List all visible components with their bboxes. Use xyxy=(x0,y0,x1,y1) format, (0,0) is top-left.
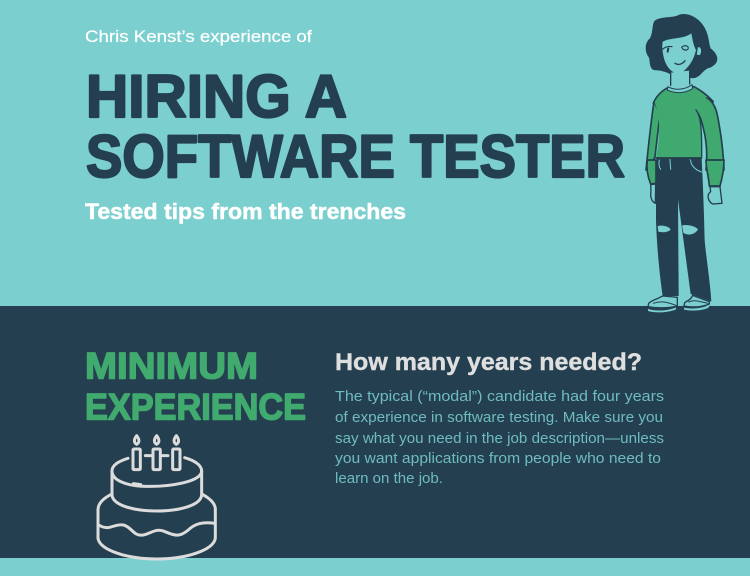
subtitle: Tested tips from the trenches xyxy=(85,199,406,224)
body text: of experience in software testing. Make sure you xyxy=(335,410,663,426)
section heading: How many years needed? xyxy=(335,349,642,376)
right sleeve xyxy=(696,96,724,170)
body text: you want applications from people who need to xyxy=(335,451,661,467)
sweater body xyxy=(654,86,707,158)
body text: learn on the job. xyxy=(335,471,443,487)
title: SOFTWARE TESTER xyxy=(86,123,625,190)
heading: minimum experience xyxy=(85,346,306,428)
heading: minimum experience: EXPERIENCE xyxy=(85,386,306,428)
body text: The typical (“modal”) candidate had four years xyxy=(335,389,664,405)
title: HIRING A xyxy=(86,63,347,130)
heading: minimum experience: MINIMUM xyxy=(85,346,258,386)
icon: birthday cake xyxy=(98,436,215,559)
panel: minimum experience band xyxy=(0,306,750,558)
illustration: person xyxy=(646,14,724,312)
body text xyxy=(335,389,664,487)
body text: say what you need in the job description—unless xyxy=(335,431,664,447)
person upper body xyxy=(646,14,724,170)
person lower body xyxy=(647,160,724,312)
intro line: Chris Kenst’s experience of xyxy=(85,27,312,46)
left sleeve xyxy=(646,102,659,170)
title xyxy=(86,63,625,190)
